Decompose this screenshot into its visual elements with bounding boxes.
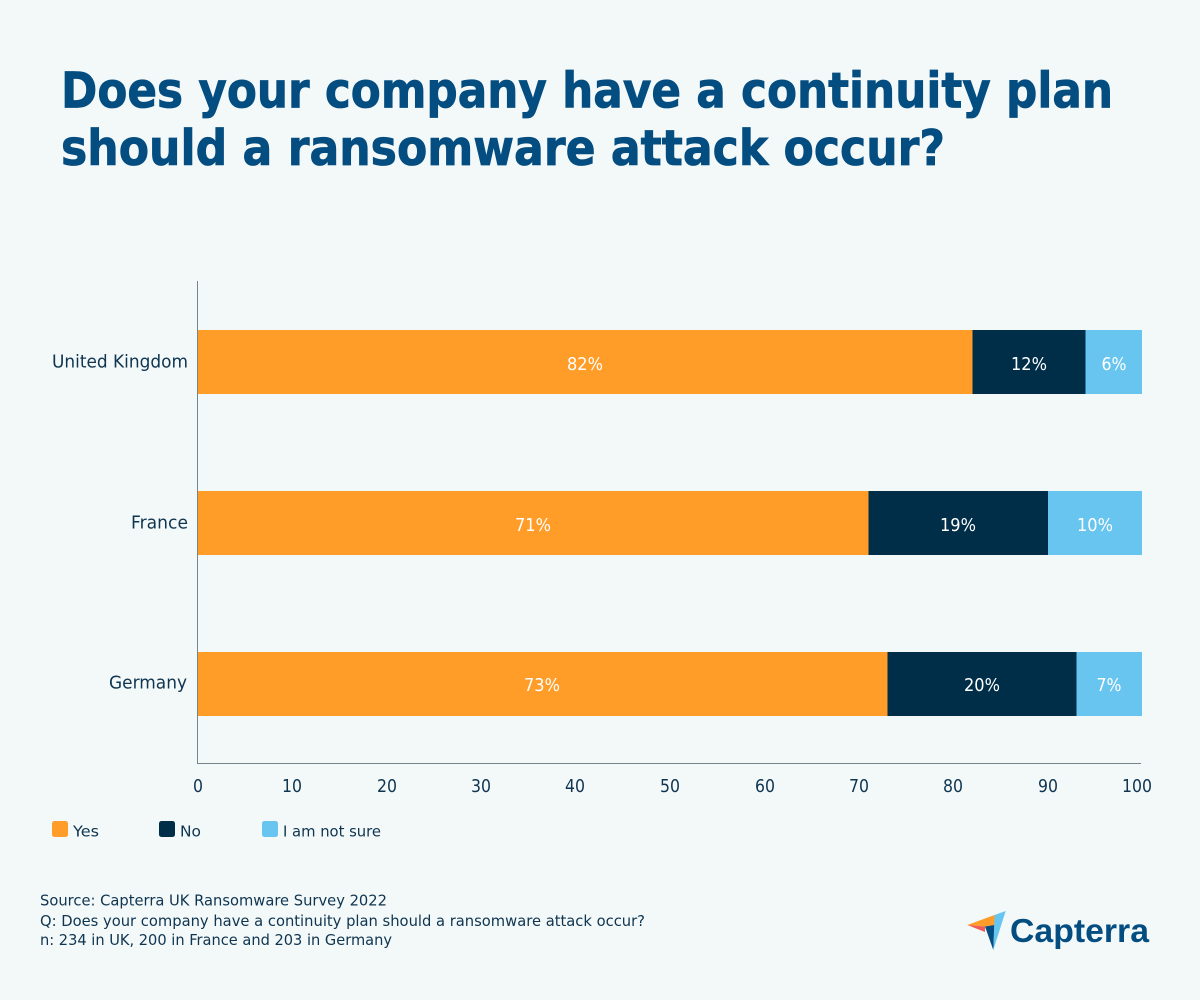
bar: France: 19% (940, 516, 976, 536)
x axis labels (193, 777, 1152, 797)
title (61, 62, 1113, 177)
category labels: United Kingdom (52, 352, 188, 372)
x axis labels: 20 (377, 777, 397, 797)
x axis labels: 80 (943, 777, 963, 797)
category labels: Germany (109, 674, 187, 694)
source note: Q: Does your company have a continuity plan should a ransomware attack occur? (40, 912, 645, 930)
source note (40, 892, 645, 949)
category labels: France (131, 514, 188, 534)
bar: France: 71% (515, 516, 551, 536)
bar: United Kingdom: 12% (1011, 355, 1047, 375)
logo: Capterra: Capterra (1010, 912, 1150, 949)
x axis labels: 30 (471, 777, 491, 797)
title: should a ransomware attack occur? (61, 120, 945, 177)
bar: France (197, 491, 1142, 555)
x axis labels: 10 (282, 777, 302, 797)
category labels (52, 352, 188, 694)
x axis labels: 90 (1038, 777, 1058, 797)
bar: Germany: 7% (1096, 676, 1122, 696)
bar: Germany: 20% (964, 676, 1000, 696)
legend: No (180, 822, 201, 840)
x axis labels: 50 (660, 777, 680, 797)
bar: Germany (197, 652, 1142, 716)
source note: Source: Capterra UK Ransomware Survey 2022 (40, 892, 387, 910)
bar: United Kingdom: 6% (1102, 355, 1126, 375)
bar: United Kingdom (197, 330, 1142, 394)
bar: Germany: 73% (524, 676, 560, 696)
legend: I am not sure (283, 822, 381, 840)
x axis labels: 70 (849, 777, 869, 797)
x axis labels: 60 (755, 777, 775, 797)
x axis labels: 0 (193, 777, 203, 797)
legend (52, 821, 381, 840)
bar: France: 10% (1077, 516, 1113, 536)
source note: n: 234 in UK, 200 in France and 203 in Germany (40, 931, 392, 949)
x axis labels: 100 (1122, 777, 1152, 797)
legend: Yes (72, 822, 99, 840)
x axis labels: 40 (565, 777, 585, 797)
stacked bar chart (52, 281, 1152, 797)
bar: United Kingdom: 82% (567, 355, 603, 375)
